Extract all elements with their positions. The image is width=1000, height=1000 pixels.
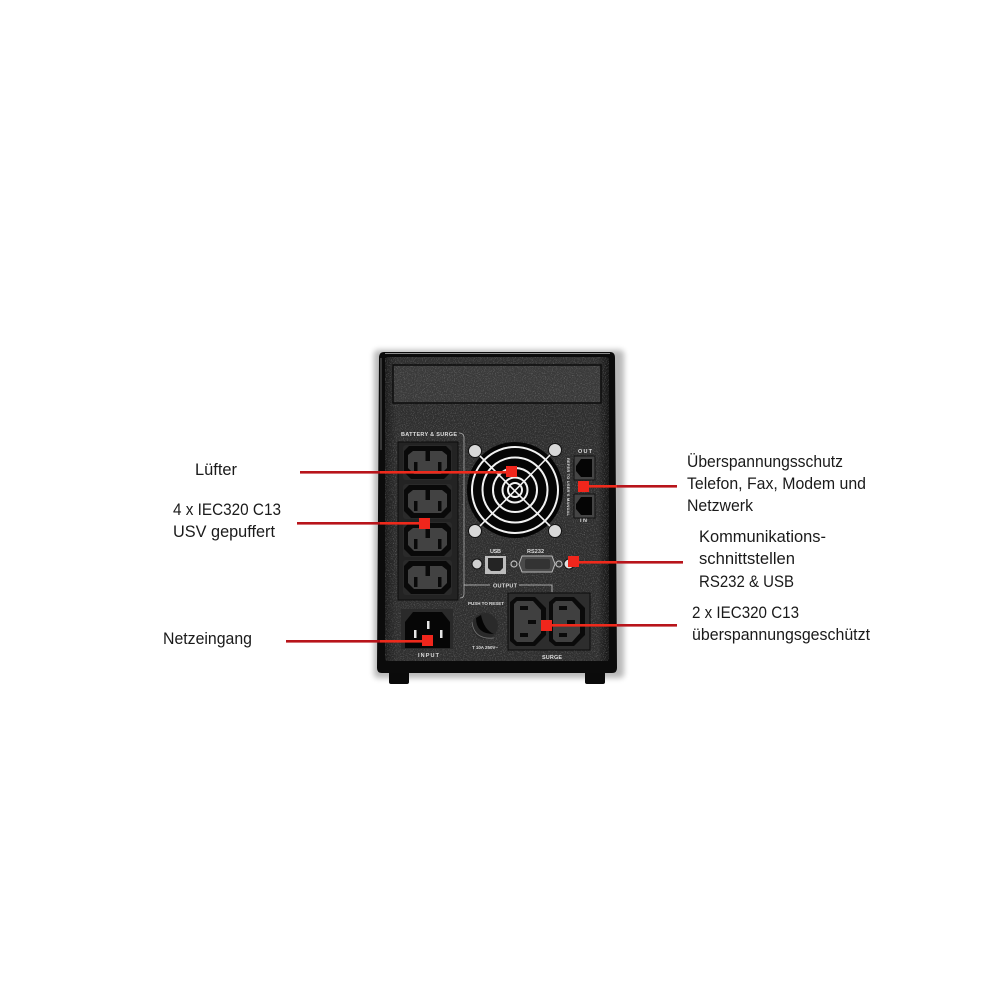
fan grille bbox=[467, 442, 563, 538]
USB and RS232 ports bbox=[472, 549, 574, 574]
callout: 2 x IEC320 C13 surge protected: 2 x IEC320 C13 bbox=[692, 603, 799, 622]
callout: communication interfaces bbox=[568, 527, 826, 591]
telephone and network ports bbox=[566, 449, 595, 524]
output bracket label bbox=[464, 584, 552, 592]
output bracket label: OUTPUT bbox=[493, 584, 518, 590]
callout: fan: Lüfter bbox=[195, 460, 237, 479]
UPS device rear view bbox=[374, 350, 624, 684]
USB and RS232 ports: USB bbox=[490, 549, 501, 555]
telephone and network ports: REFER TO USER'S MANUAL bbox=[566, 458, 571, 517]
callout: 2 x IEC320 C13 surge protected bbox=[541, 603, 870, 644]
battery and surge outlet group bbox=[398, 432, 464, 600]
callout: mains input: Netzeingang bbox=[163, 629, 252, 648]
callout: communication interfaces: RS232 & USB bbox=[699, 572, 794, 591]
battery and surge outlet group: BATTERY & SURGE bbox=[401, 432, 457, 438]
top recessed panel bbox=[393, 365, 601, 403]
USB and RS232 ports: RS232 bbox=[527, 549, 544, 555]
fuse reset button: PUSH TO RESET bbox=[468, 601, 504, 606]
callout: 4 x IEC320 C13 bbox=[173, 500, 430, 541]
input socket: INPUT bbox=[418, 653, 440, 659]
callout: 4 x IEC320 C13: 4 x IEC320 C13 bbox=[173, 500, 281, 519]
input socket bbox=[401, 609, 453, 659]
telephone and network ports: IN bbox=[580, 518, 587, 524]
surge outlets bbox=[508, 593, 590, 661]
telephone and network ports: OUT bbox=[578, 449, 593, 455]
fuse reset button bbox=[468, 601, 504, 650]
callout: surge protection for phone and network: Telefon, Fax, Modem und bbox=[687, 474, 866, 493]
fuse reset button: T 10A 250V~ bbox=[472, 645, 498, 650]
callout: 2 x IEC320 C13 surge protected: überspannungsgeschützt bbox=[692, 625, 870, 644]
callout: fan bbox=[195, 460, 517, 479]
device shadow bbox=[374, 350, 624, 678]
callout: mains input bbox=[163, 629, 433, 648]
callout: communication interfaces: schnittstellen bbox=[699, 549, 795, 568]
callout: communication interfaces: Kommunikations- bbox=[699, 527, 826, 546]
callout: surge protection for phone and network: Überspannungsschutz bbox=[687, 452, 843, 471]
surge outlets: SURGE bbox=[542, 655, 562, 661]
device housing bbox=[377, 352, 617, 673]
callout: 4 x IEC320 C13: USV gepuffert bbox=[173, 522, 275, 541]
device feet bbox=[389, 670, 605, 684]
callout: surge protection for phone and network: Netzwerk bbox=[687, 496, 753, 515]
callout: surge protection for phone and network bbox=[578, 452, 866, 515]
